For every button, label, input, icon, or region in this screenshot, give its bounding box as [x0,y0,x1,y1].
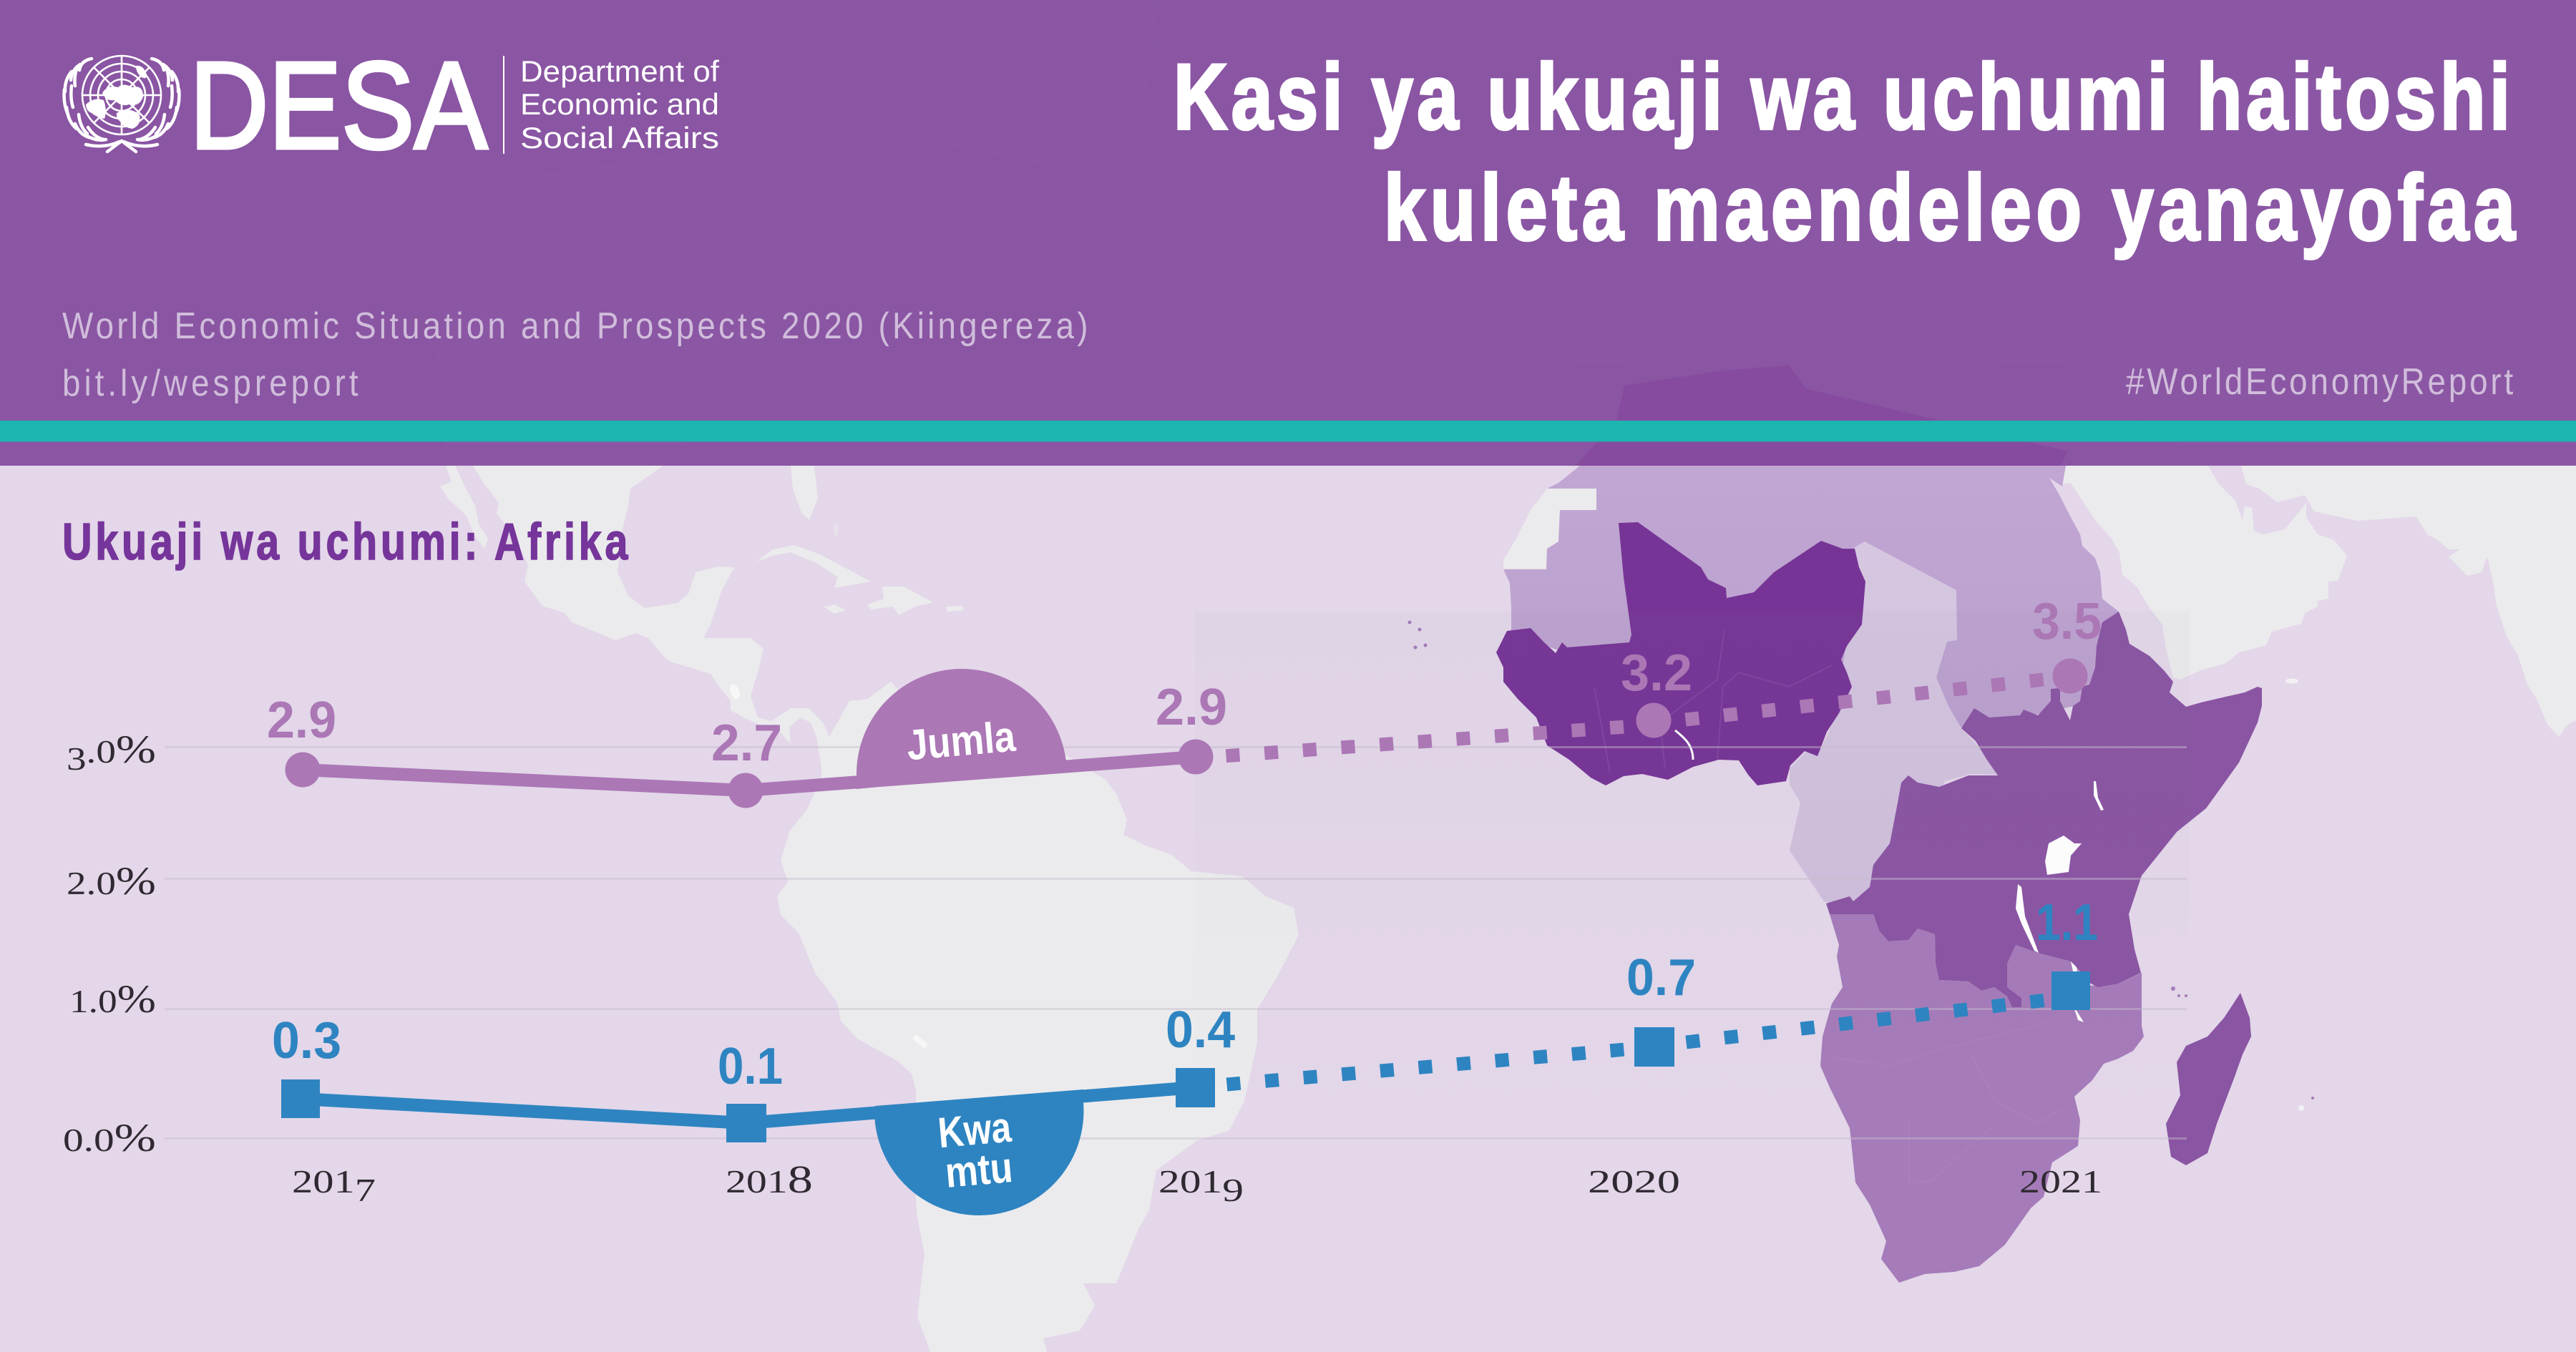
small islands [1408,621,2314,1099]
y axis labels [63,728,156,1160]
report source text: World Economic Situation and Prospects 2020 (Kiingereza) [62,305,1088,347]
department name [520,54,719,155]
title: Kasi ya ukuaji wa uchumi haitoshi [1174,44,2510,149]
y axis labels: .0 [87,734,116,770]
values: 1.1 [2036,894,2098,951]
series label [936,1103,1015,1197]
values: 2.9 [1156,679,1227,736]
values [267,593,2102,772]
world map background [440,466,2576,1352]
series: Jumla (total) [267,593,2102,808]
solid line [301,1087,1195,1123]
x axis labels: 9 [1222,1172,1244,1208]
faint header map [429,0,2576,466]
values: 0.1 [718,1038,783,1095]
series label: Kwa [936,1103,1013,1157]
y axis labels: % [116,728,156,771]
department name: Department of [520,54,719,88]
values: 3.2 [1621,645,1692,702]
report source text [62,305,1088,404]
x axis labels: 201 [1158,1164,1206,1200]
region: Western Sahara [1503,489,1596,569]
region: Madagascar [2166,993,2251,1165]
hashtag: #WorldEconomyReport [2126,361,2514,403]
y axis labels: 0.0 % [63,1116,156,1160]
region: North Africa [1503,466,2119,730]
logo: UN DESA [64,36,719,175]
dotted projection [1226,680,2046,756]
values: 0.7 [1626,949,1696,1006]
faint country borders [1594,630,1832,773]
x axis labels: 201 8 [726,1157,813,1201]
series label: Jumla [904,712,1018,769]
y axis labels: 2.0% [67,859,156,903]
logo divider [503,56,504,154]
series label: mtu [943,1143,1015,1197]
y axis labels: 1.0% [69,977,156,1021]
x axis labels [292,1157,2102,1208]
land: Arabia and South Asia [2062,466,2576,737]
grid lines [165,746,2187,1140]
values [272,894,2098,1095]
markers [285,658,2088,808]
x axis labels: 2020 [1588,1164,1680,1200]
continents [86,66,147,129]
markers [281,971,2090,1142]
department name: Social Affairs [520,121,719,155]
x axis labels: 2021 [2019,1164,2102,1200]
x axis labels: 7 [355,1172,376,1208]
values: 2.7 [711,715,782,772]
region: Sinai [2042,466,2066,486]
globe rings [82,56,161,134]
y axis labels: 3 [67,741,87,777]
series label bubble [857,669,1066,789]
African lakes [1675,730,2104,1022]
department name: Economic and [520,87,719,121]
report source text: bit.ly/wespreport [62,363,358,404]
icon: UN emblem [64,56,179,152]
values: 2.9 [267,692,336,749]
values: 0.3 [272,1012,341,1069]
solid line [303,757,1196,790]
title: kuleta maendeleo yanayofaa [1384,155,2516,260]
dotted projection [1226,1000,2046,1084]
laurel wreath [64,59,122,152]
lakes: Americas [728,683,928,1049]
region: East Africa [1826,612,2262,1007]
teal band [0,421,2576,442]
line chart [63,593,2187,1215]
series: Kwa mtu (per capita) [272,894,2098,1215]
region: Central Africa [1790,542,1996,903]
chart heading: Ukuaji wa uchumi: Afrika [62,513,628,570]
x axis labels: 201 [292,1164,341,1200]
chart overlay panel [1195,612,2190,1352]
title [1174,44,2516,260]
DESA wordmark: DESA [190,36,488,175]
background sea [0,466,2576,1352]
values: 0.4 [1166,1001,1235,1059]
header panel [0,0,2576,466]
region: Southern Africa [1820,914,2144,1283]
series label bubble [874,1089,1083,1215]
region: West Africa [1496,522,1865,785]
land: Americas [440,466,1299,1352]
values: 3.5 [2032,593,2102,650]
